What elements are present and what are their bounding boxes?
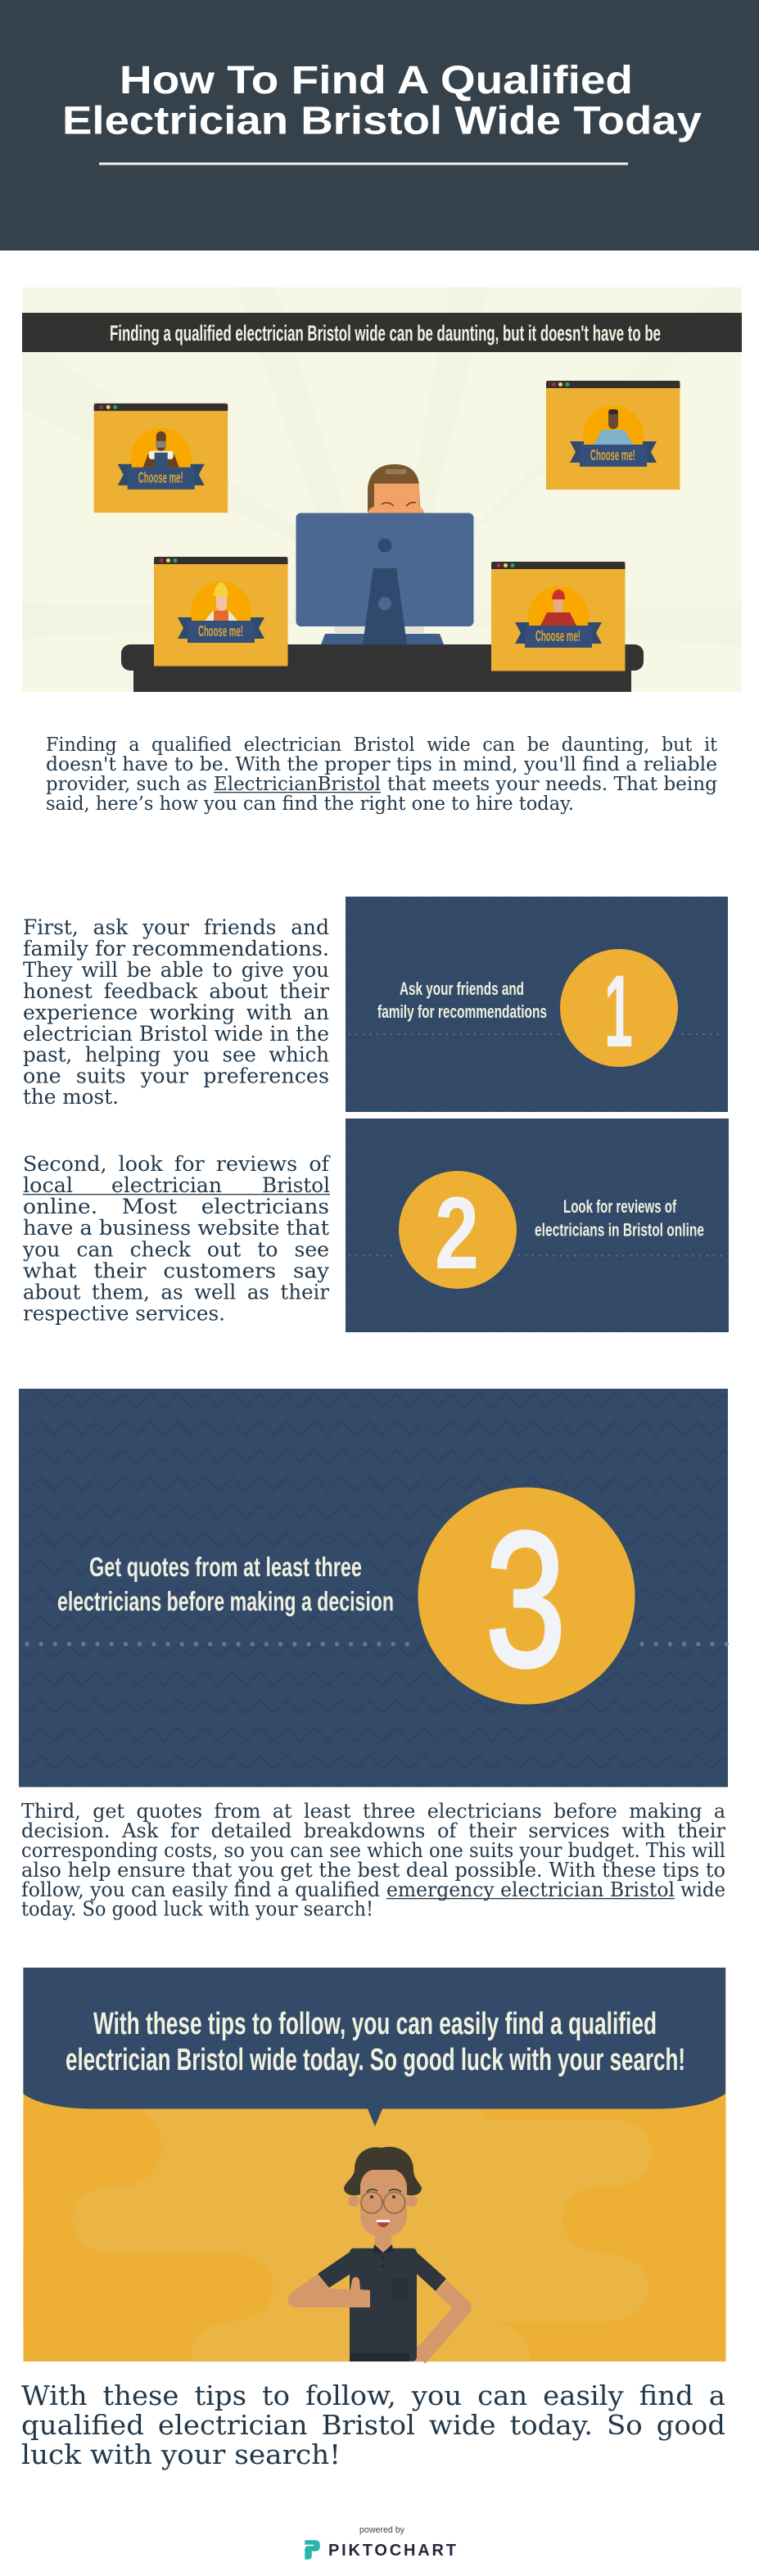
step 1 text: honest feedback about their <box>23 979 329 1003</box>
step 3 text: decision. Ask for detailed breakdowns of their services with their <box>21 1819 726 1842</box>
window card 1: overalls worker <box>94 404 228 513</box>
closing statement <box>21 2379 725 2470</box>
face <box>360 2170 407 2237</box>
closing illustration <box>23 1968 725 2363</box>
caption bar <box>22 313 742 352</box>
step 3 text: corresponding costs, so you can see which one suits your budget. This will <box>21 1839 725 1862</box>
footer: powered by Piktochart: PIKTOCHART <box>328 2542 456 2560</box>
step 3 text: Third, get quotes from at least three electricians before making a <box>21 1800 725 1823</box>
footer: powered by Piktochart <box>305 2525 456 2560</box>
step 2 panel: Look for reviews of <box>563 1196 676 1217</box>
step 2 text: electrician <box>111 1173 222 1197</box>
step 2 text: Bristol <box>262 1173 330 1197</box>
worried person behind monitor <box>368 464 424 513</box>
step 1 panel: 1 <box>604 955 633 1069</box>
step 3 text <box>21 1800 726 1921</box>
keyboard <box>321 634 444 644</box>
footer: powered by Piktochart: powered by <box>359 2525 404 2535</box>
step 2 panel <box>346 1119 729 1332</box>
background blobs <box>23 1968 725 2361</box>
step 1 panel <box>346 897 728 1112</box>
window card 4: red cap worker <box>491 562 626 671</box>
step 1 text: experience working with an <box>23 1001 329 1024</box>
closing statement: qualified electrician Bristol wide today. So good <box>21 2409 725 2441</box>
left arm with thumb <box>287 2275 370 2307</box>
intro paragraph <box>46 733 718 815</box>
title <box>62 59 702 142</box>
glasses and eyes <box>361 2190 405 2213</box>
step 1 text: past, helping you see which <box>23 1043 329 1066</box>
intro paragraph: said, here’s how you can find the right one to hire today. <box>46 792 574 815</box>
illustration: choosing an electrician <box>22 287 742 692</box>
header banner <box>0 0 759 251</box>
title: How To Find A Qualified <box>120 59 633 102</box>
ears <box>348 2195 359 2207</box>
step 1 text: electrician Bristol wide in the <box>23 1022 329 1046</box>
step 2 text: about them, as well as their <box>23 1281 329 1304</box>
step 3 text: also help ensure that you get the best deal possible. With these tips to <box>21 1859 725 1882</box>
step 2 text: local <box>23 1173 73 1197</box>
monitor <box>296 513 473 644</box>
desk <box>121 644 644 692</box>
step 3 text: follow, you can easily find a qualified <box>21 1878 380 1901</box>
step 3 panel <box>19 1389 728 1787</box>
window card 3: hard hat worker: Choose me! <box>198 623 243 639</box>
step 3 panel: 3 <box>486 1492 566 1706</box>
step 1 text: one suits your preferences <box>23 1064 329 1087</box>
step 1 panel: Ask your friends and <box>400 978 524 999</box>
step 2 text: Second, look for reviews of <box>23 1152 331 1176</box>
step 2 text: you can check out to see <box>22 1238 329 1261</box>
sleeves <box>318 2251 351 2288</box>
window card 2: casual shirt worker <box>546 381 680 490</box>
step 2 panel: 2 <box>435 1177 479 1290</box>
intro paragraph: provider, such as <box>46 772 207 795</box>
icon: Piktochart logo <box>305 2541 319 2559</box>
step 1 panel: family for recommendations <box>377 1001 547 1022</box>
step 1 text: They will be able to give you <box>23 958 329 982</box>
smile <box>377 2221 390 2227</box>
window card 1: overalls worker: Choose me! <box>138 470 183 486</box>
smiling man giving thumbs up <box>287 2147 463 2361</box>
speech bubble <box>23 1968 725 2126</box>
step 2 text: have a business website that <box>23 1216 329 1240</box>
closing statement: With these tips to follow, you can easily find a <box>21 2379 725 2411</box>
window card 3: hard hat worker <box>154 557 288 667</box>
step 1 text: First, ask your friends and <box>23 915 329 939</box>
step 3 panel: electricians before making a decision <box>57 1586 394 1616</box>
intro paragraph: Finding a qualified electrician Bristol wide can be daunting, but it <box>46 733 718 756</box>
hair <box>344 2147 422 2195</box>
window card 2: casual shirt worker: Choose me! <box>590 447 635 463</box>
intro paragraph: that meets your needs. That being <box>387 772 717 795</box>
intro paragraph: doesn't have to be. With the proper tips in mind, you'll find a reliable <box>46 752 717 775</box>
step 2 text: what their customers say <box>23 1259 330 1282</box>
step 2 text: online. Most electricians <box>23 1195 329 1218</box>
step 1 text: family for recommendations. <box>23 937 329 960</box>
step 3 text: emergency electrician Bristol <box>386 1878 675 1901</box>
step 3 text: wide <box>680 1878 725 1901</box>
neck <box>375 2233 391 2253</box>
step 3 panel: Get quotes from at least three <box>89 1552 362 1582</box>
step 2 text: respective services. <box>23 1302 225 1325</box>
step 1 text: the most. <box>23 1085 119 1109</box>
torso <box>350 2248 417 2361</box>
step 1 text <box>23 915 329 1109</box>
title: Electrician Bristol Wide Today <box>62 100 702 142</box>
intro paragraph: ElectricianBristol <box>214 772 381 795</box>
step 2 text <box>22 1152 331 1325</box>
closing statement: luck with your search! <box>21 2438 341 2470</box>
right arm <box>419 2286 463 2358</box>
step 3 text: today. So good luck with your search! <box>21 1898 373 1921</box>
window card 4: red cap worker: Choose me! <box>535 628 581 644</box>
